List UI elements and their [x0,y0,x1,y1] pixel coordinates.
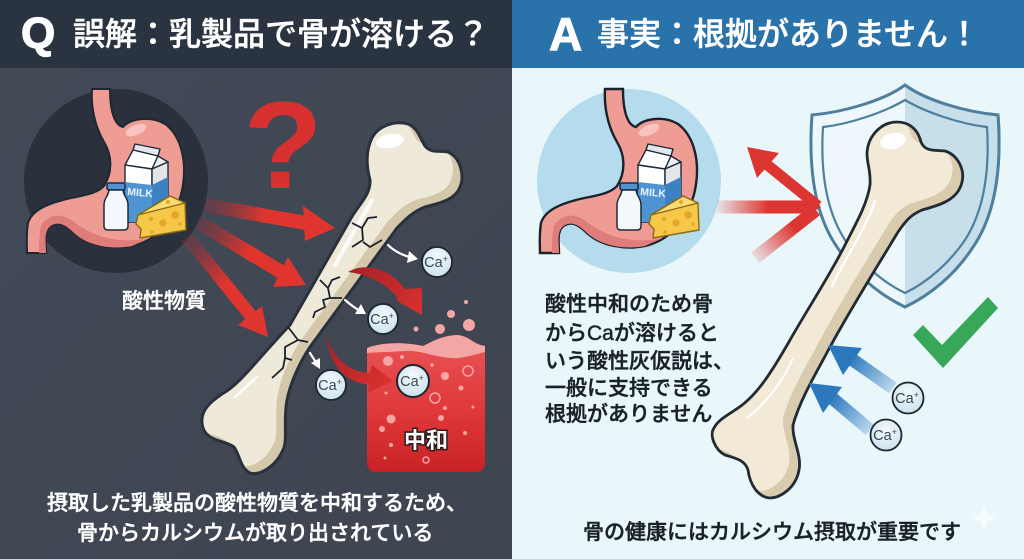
cracks [272,217,382,378]
calcium ion lower: Ca [318,378,337,394]
calcium ion right lower [870,420,902,450]
bone: cracked [193,116,462,474]
beaker: neutralization [367,300,485,472]
curved arrow: calcium to beaker upper [348,267,422,315]
panel: left background [0,0,512,559]
calcium ion top: Ca [424,255,443,271]
stomach [540,89,697,253]
arrow: calcium into bone upper [828,345,893,388]
calcium ion right lower: Ca [873,428,892,444]
icon: sparkle [971,505,997,532]
header: myth: Q [21,9,55,58]
calcium ion lower: + [337,377,342,387]
calcium ion in beaker: Ca [400,374,419,390]
caption: right: 骨の健康にはカルシウム摂取が重要です [583,521,961,544]
cheese wedge [136,196,186,238]
calcium ion middle [368,304,398,334]
icon: left dark circle with stomach and dairy [24,89,208,273]
header: fact: A [549,8,582,60]
calcium ion in beaker [397,365,429,397]
milk carton [638,144,681,222]
calcium ion top: + [443,254,448,264]
calcium ion right upper [892,382,924,414]
milk bottle [617,183,641,230]
text block: explanation: 根拠がありません [545,403,712,426]
milk bottle [104,183,128,230]
milk carton [125,144,168,222]
arrow: acid to bone lower [187,237,268,337]
calcium ion right upper: Ca [895,391,914,407]
text block: explanation: いう酸性灰仮説は、 [545,350,734,373]
label: acidic substances: 酸性物質 [122,290,206,313]
arrow: acid deflected by shield [717,147,821,258]
milk carton: MILK [640,186,667,200]
calcium ion middle: + [389,311,394,321]
text block: explanation: からCaが溶けると [545,322,719,345]
label: neutralization: 中和 [404,428,448,453]
milk carton: MILK [127,186,154,200]
header: fact: 事実：根拠がありません！ [597,16,980,52]
calcium ion lower [316,370,346,400]
calcium ion middle: Ca [370,312,389,328]
calcium ion right upper: + [914,390,919,400]
panel: right background [512,0,1024,559]
caption: left: 摂取した乳製品の酸性物質を中和するため、 [47,492,467,515]
question mark: ? [243,76,323,214]
caption: left: 骨からカルシウムが取り出されている [77,522,433,545]
text block: explanation: 酸性中和のため骨 [545,293,713,316]
text block: explanation: 一般に支持できる [545,377,713,400]
header: fact [512,0,1024,68]
cheese wedge [649,196,699,238]
header: myth [0,0,512,68]
stomach [27,89,184,253]
caption: left [47,492,467,545]
arrows: calcium leaving bone [310,245,418,369]
shield [811,85,999,307]
arrow: calcium into bone lower [809,383,870,430]
text block: explanation [545,293,734,426]
curved arrow: calcium to beaker lower [325,335,393,393]
arrow: acid to bone upper [205,205,335,241]
bubbles [379,300,475,460]
arrow: acid to bone middle [198,222,306,287]
header: myth: 誤解：乳製品で骨が溶ける？ [73,16,489,52]
icon: check mark [913,297,998,368]
icon: right light circle with stomach and dairy [537,89,721,273]
calcium ion in beaker: + [419,373,424,383]
calcium ion top [422,247,452,277]
bone: healthy [702,115,963,498]
calcium ion right lower: + [892,427,897,437]
